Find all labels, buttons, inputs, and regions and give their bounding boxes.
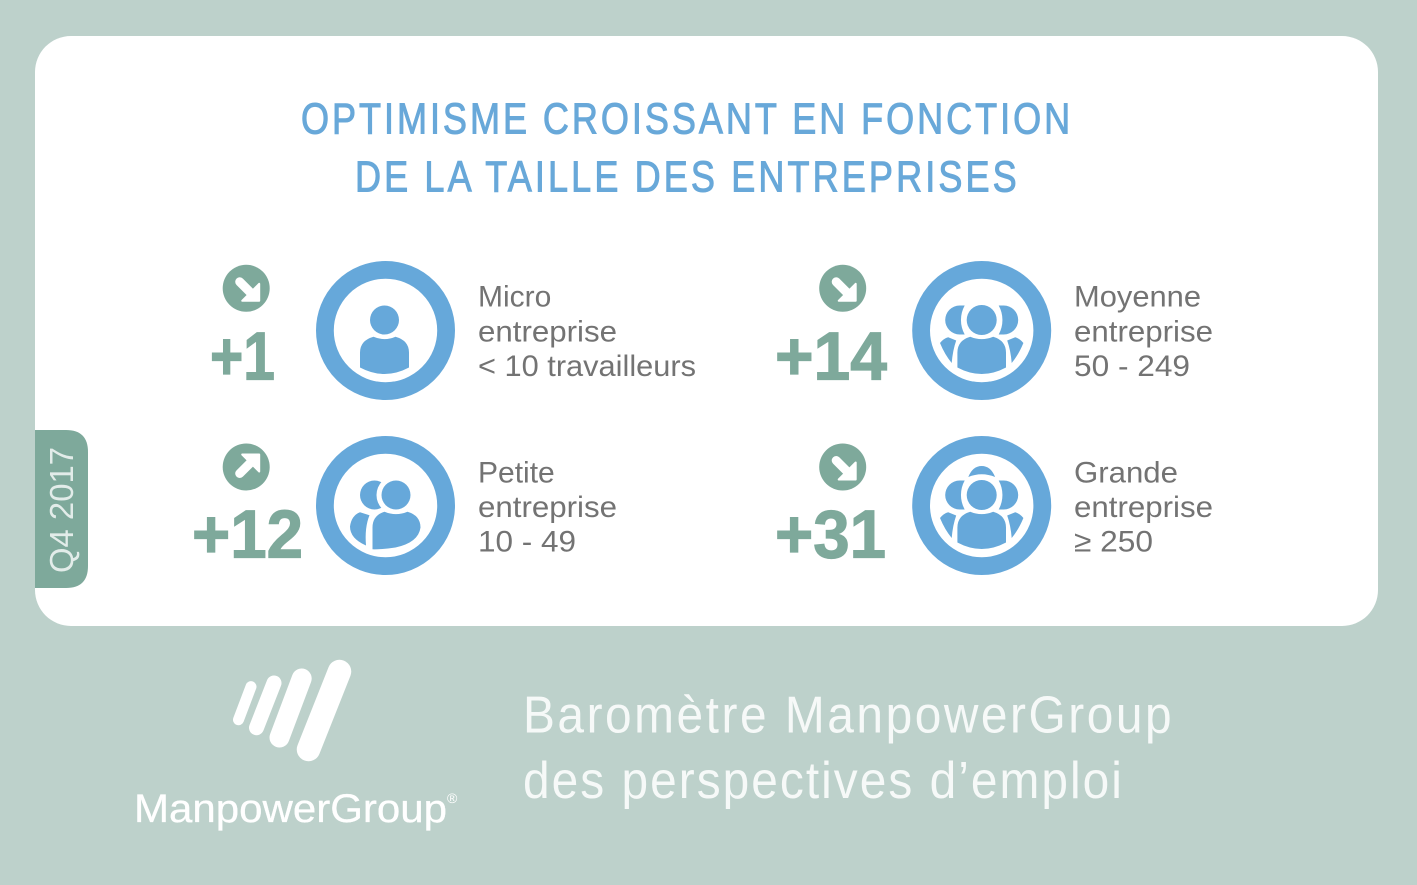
label: moyenne entreprise: Moyenne [1074, 281, 1201, 314]
logo wordmark: ManpowerGroup [134, 787, 447, 831]
logo wordmark: ® [447, 790, 458, 806]
label: micro entreprise: Micro [478, 281, 551, 314]
label: grande entreprise: entreprise [1074, 491, 1213, 524]
label: grande entreprise [1074, 457, 1213, 558]
logo: ManpowerGroup [134, 672, 458, 831]
title: OPTIMISME CROISSANT EN FONCTION [301, 94, 1070, 143]
label: micro entreprise [478, 281, 696, 383]
label: micro entreprise: entreprise [478, 316, 617, 349]
tab: Q4 2017: Q4 2017 [43, 447, 80, 573]
tab: Q4 2017 [35, 430, 88, 588]
title [301, 94, 1070, 202]
icon: arrow down-right [819, 265, 866, 312]
number: +14: +14 [775, 318, 887, 394]
footer text: barometer title: des perspectives d’emploi [523, 751, 1122, 809]
label: moyenne entreprise [1074, 281, 1213, 383]
icon: two people [325, 445, 446, 566]
title: DE LA TAILLE DES ENTREPRISES [355, 152, 1017, 202]
icon: arrow down-right [819, 444, 866, 490]
footer text: barometer title [523, 686, 1172, 809]
label: petite entreprise: Petite [478, 457, 555, 490]
icon: one person [325, 270, 446, 391]
label: moyenne entreprise: 50 - 249 [1074, 350, 1190, 383]
group: grande entreprise [775, 444, 1213, 572]
label: micro entreprise: < 10 travailleurs [478, 350, 696, 383]
icon: crowd of people [921, 445, 1042, 566]
label: grande entreprise: Grande [1074, 457, 1178, 490]
group: moyenne entreprise [775, 265, 1213, 394]
icon: arrow down-right [223, 265, 270, 312]
label: moyenne entreprise: entreprise [1074, 316, 1213, 349]
number: +12: +12 [192, 496, 303, 572]
label: petite entreprise [478, 457, 617, 558]
panel: white card [35, 36, 1378, 626]
number: +1: +1 [210, 318, 275, 394]
group: micro entreprise [210, 265, 696, 394]
label: petite entreprise: 10 - 49 [478, 525, 576, 558]
label: petite entreprise: entreprise [478, 491, 617, 524]
icon: three people [921, 270, 1042, 391]
number: +31: +31 [775, 496, 886, 572]
icon: arrow up-right [223, 444, 270, 490]
label: grande entreprise: ≥ 250 [1074, 525, 1153, 558]
footer text: barometer title: Baromètre ManpowerGroup [523, 686, 1172, 744]
icon: logo bars [238, 672, 340, 750]
group: petite entreprise [192, 444, 617, 572]
